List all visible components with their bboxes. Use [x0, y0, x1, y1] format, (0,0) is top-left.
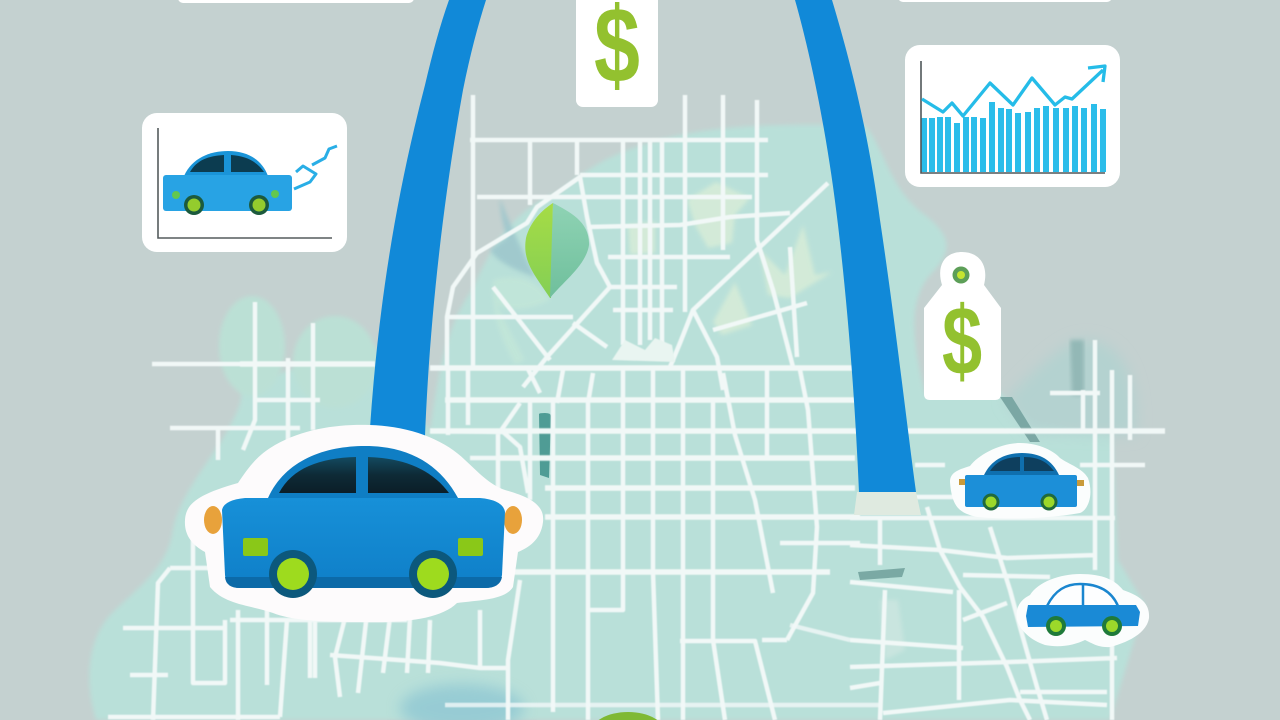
pillar	[1082, 585, 1084, 606]
roof outline	[1047, 584, 1118, 606]
upper grid verticals	[473, 95, 797, 367]
lights	[959, 479, 967, 485]
pale leaves right of centre	[628, 182, 832, 335]
left streets	[108, 302, 407, 720]
car small blue	[163, 151, 292, 215]
white sticker halo	[185, 425, 543, 622]
wheel left	[184, 195, 204, 215]
upper grid horizontals	[447, 140, 807, 330]
top right card fragment	[898, 0, 1112, 2]
trend line with arrow	[922, 66, 1105, 116]
wheel left	[982, 494, 1000, 510]
teal marker	[539, 413, 551, 478]
wheel left	[1046, 616, 1066, 636]
right streets	[850, 340, 1145, 720]
car right middle	[950, 443, 1090, 518]
wheel right	[409, 550, 457, 598]
green side lights	[243, 538, 268, 556]
pale landmark scribble	[612, 338, 675, 362]
lights	[204, 506, 222, 534]
roof	[184, 151, 268, 176]
road network	[108, 95, 1165, 720]
green dome bottom	[590, 712, 666, 720]
left foliage blob two	[293, 316, 377, 408]
bars	[924, 102, 1103, 172]
roof	[268, 446, 458, 498]
arch right leg	[795, 0, 916, 492]
white sticker halo	[1017, 574, 1149, 647]
map pin leaf	[525, 203, 589, 298]
upper leaf shadow	[490, 198, 535, 277]
tag body	[576, 0, 658, 107]
card background	[142, 113, 347, 252]
white sticker halo	[950, 443, 1090, 518]
body	[163, 175, 292, 211]
arch base	[854, 492, 921, 515]
city map area	[89, 125, 1145, 720]
car large	[185, 425, 543, 622]
wheel left	[269, 550, 317, 598]
side lights	[172, 191, 180, 199]
arch left leg	[370, 0, 486, 436]
wheel right	[249, 195, 269, 215]
lower centre verticals	[553, 368, 817, 720]
left foliage blob one	[219, 296, 285, 396]
blue pond tint	[400, 684, 524, 720]
arch	[370, 0, 916, 492]
car right bottom	[1017, 574, 1149, 647]
tag body	[924, 252, 1001, 400]
card background	[905, 45, 1120, 187]
card: car emissions	[142, 113, 347, 252]
windows	[990, 457, 1054, 471]
leaf right half	[550, 203, 589, 298]
windows	[190, 155, 264, 172]
exhaust squiggle	[294, 146, 337, 189]
map land shape	[89, 125, 1145, 720]
tag hole	[952, 266, 970, 284]
left window	[279, 457, 356, 493]
axes	[158, 128, 332, 238]
wheel right	[1102, 616, 1122, 636]
wheel right	[1040, 494, 1058, 510]
upper diagonals and curves	[447, 177, 828, 393]
body	[965, 475, 1077, 507]
top left card fragment	[178, 0, 414, 3]
lower sill	[225, 577, 502, 588]
light plaza patch	[880, 600, 905, 660]
body	[1026, 605, 1140, 627]
body	[222, 498, 505, 588]
lower left to centre extras	[445, 625, 880, 705]
dark teal smudges	[1000, 397, 1040, 442]
price tag top	[576, 0, 658, 107]
axes	[921, 61, 1105, 173]
lower pale leaf	[493, 277, 550, 365]
faded right foliage	[1005, 339, 1136, 435]
right window	[368, 457, 449, 493]
card: rising bar chart	[905, 45, 1120, 187]
main horizontals	[240, 364, 1165, 572]
price tag right	[924, 252, 1001, 400]
roof	[984, 453, 1059, 475]
dollar sign: $	[942, 287, 982, 396]
leaf left half	[525, 203, 553, 298]
